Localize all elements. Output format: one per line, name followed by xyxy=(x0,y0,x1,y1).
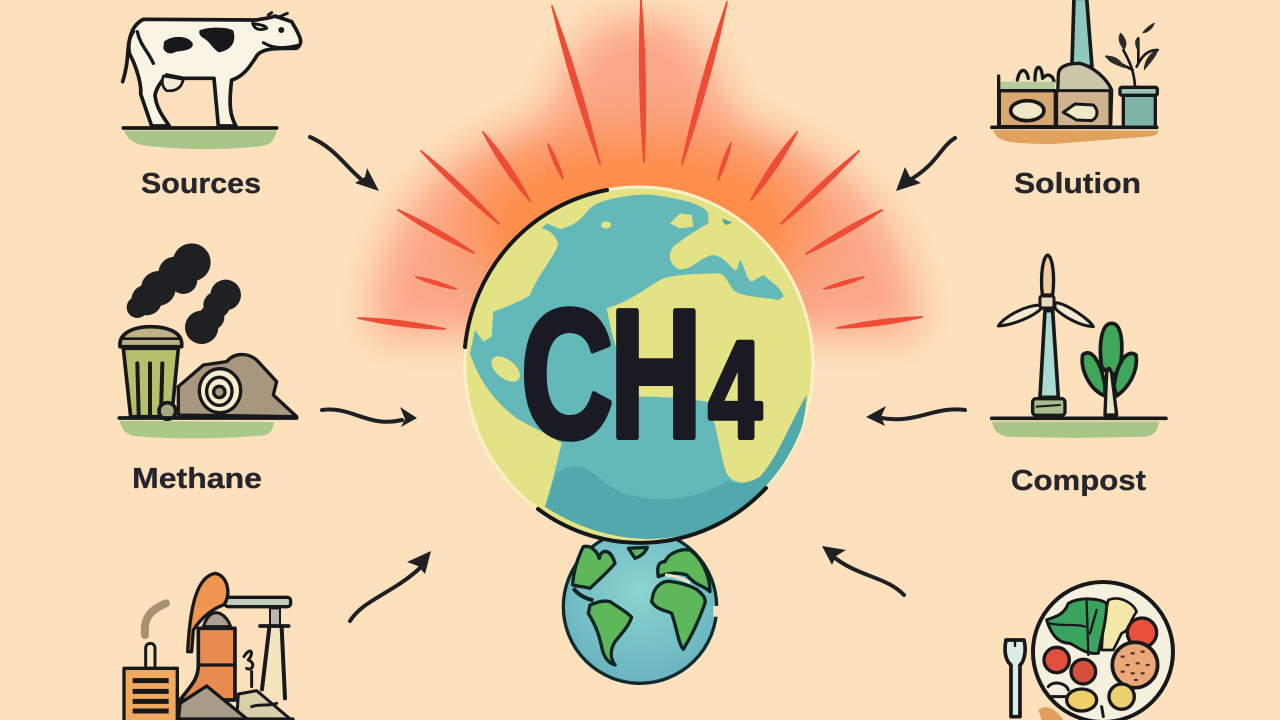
pot xyxy=(1123,95,1155,127)
panel: plant-based food plate xyxy=(1005,582,1173,720)
compost bin right xyxy=(1057,91,1110,127)
smoke clouds xyxy=(127,243,241,344)
tomato slices xyxy=(1044,647,1069,673)
small globe xyxy=(563,530,720,683)
label: Methane: Methane xyxy=(132,463,262,495)
compost mound xyxy=(1057,63,1112,125)
tail xyxy=(123,32,133,82)
waste heap xyxy=(178,355,297,417)
heat glow xyxy=(372,18,918,335)
arrow: methane to globe xyxy=(322,407,417,427)
cow body xyxy=(129,16,301,126)
trash bin xyxy=(123,348,178,417)
ground xyxy=(120,421,274,438)
label: Solution: Solution xyxy=(1014,168,1141,200)
plant xyxy=(1107,38,1158,86)
patty xyxy=(1112,642,1158,688)
turbine tower xyxy=(1040,311,1058,397)
panel: oil and industry xyxy=(124,573,293,720)
tower xyxy=(180,628,235,700)
central globe xyxy=(465,187,813,543)
panel: sources cow xyxy=(123,13,301,149)
cow spots xyxy=(163,28,234,53)
oceans and land masses xyxy=(470,195,807,539)
orange ground xyxy=(993,130,1158,144)
plate xyxy=(1033,582,1173,720)
formula CH4: C xyxy=(521,272,613,476)
label: Compost: Compost xyxy=(1011,465,1146,497)
horse head xyxy=(188,573,228,652)
ground xyxy=(124,131,277,149)
turbine blades xyxy=(1042,255,1054,295)
sprout xyxy=(1017,67,1054,82)
fruits xyxy=(1067,689,1097,711)
arrow: solution to globe xyxy=(896,138,955,191)
panel: methane waste xyxy=(119,243,297,438)
dirt heaps xyxy=(237,691,293,720)
udder xyxy=(162,76,183,91)
control box xyxy=(124,668,177,720)
tower xyxy=(1072,0,1092,67)
turbine base xyxy=(1033,399,1065,415)
label: Sources: Sources xyxy=(141,168,261,200)
arrow: sources to globe xyxy=(310,137,379,191)
cheese xyxy=(1102,598,1137,650)
ground xyxy=(992,422,1159,438)
compost bin left xyxy=(999,82,1055,90)
smoke wisp xyxy=(145,603,166,635)
arrow: industry to globe xyxy=(350,551,431,621)
log swirl xyxy=(199,369,241,413)
formula CH4: 4 xyxy=(708,314,762,467)
arrow: compost to globe xyxy=(866,406,965,426)
heat rays xyxy=(358,0,922,329)
tree xyxy=(1100,323,1122,374)
fork xyxy=(1005,640,1025,717)
tomato xyxy=(1127,618,1157,647)
formula CH4: H xyxy=(610,272,702,476)
arrow: food to globe xyxy=(822,546,904,595)
panel: compost wind turbine and plant xyxy=(992,255,1166,438)
lettuce xyxy=(1047,599,1107,654)
beam xyxy=(225,597,291,607)
panel: solution compost bins xyxy=(992,0,1158,144)
chimney xyxy=(146,643,155,668)
green continents xyxy=(573,546,710,665)
pump legs xyxy=(263,628,285,698)
